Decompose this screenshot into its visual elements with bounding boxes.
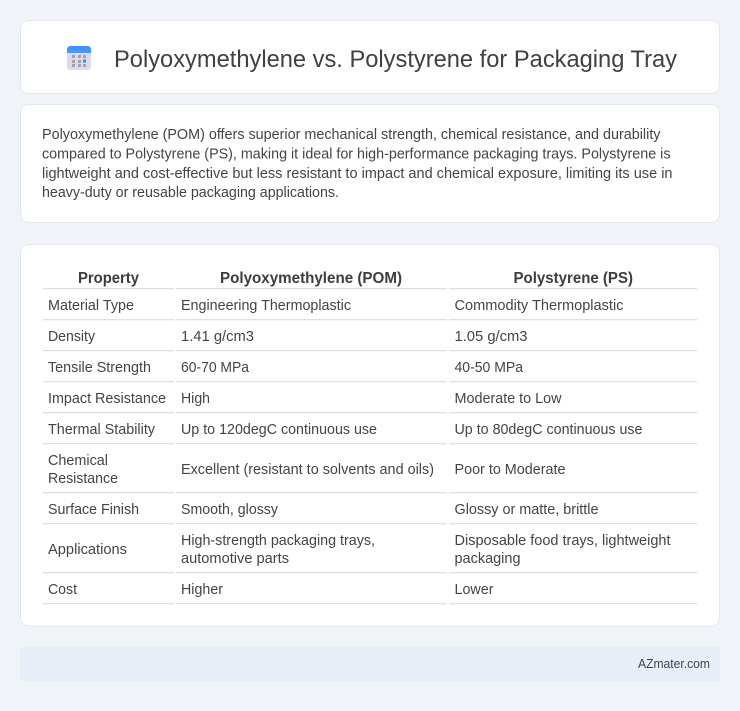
text block: summary: Polyoxymethylene (POM) offers superior mechanical strength, chemical resistance, and durability: [42, 127, 661, 143]
text block: summary: lightweight and cost-effective but less resistant to impact and chemical exposure, limiting its use in: [42, 166, 672, 182]
row: cost: Cost: [48, 582, 77, 598]
row: cost: Higher: [181, 582, 223, 598]
row: chemical resistance: Poor to Moderate: [454, 462, 566, 478]
row: density: Density: [48, 329, 96, 345]
row: material type: [43, 298, 697, 320]
row: cost: [43, 582, 697, 604]
row: tensile strength: Tensile Strength: [48, 360, 151, 376]
row: surface finish: Glossy or matte, brittle: [454, 502, 598, 518]
text block: summary: compared to Polystyrene (PS), making it ideal for high-performance packaging trays. Polystyrene is: [42, 146, 670, 162]
row: material type: Material Type: [48, 298, 134, 314]
row: surface finish: [43, 502, 697, 524]
footer bar: AZmater.com: [638, 657, 710, 671]
row: tensile strength: [43, 360, 697, 382]
row: applications: High-strength packaging trays,: [181, 533, 375, 549]
row: surface finish: Surface Finish: [48, 502, 139, 518]
row: thermal stability: [43, 422, 697, 444]
row: impact resistance: High: [181, 391, 210, 407]
row: density: [43, 329, 697, 351]
row: surface finish: Smooth, glossy: [181, 502, 279, 518]
row: impact resistance: Impact Resistance: [48, 391, 166, 407]
row: applications: Applications: [48, 542, 127, 558]
table header row: Polyoxymethylene (POM): [220, 270, 402, 287]
row: applications: packaging: [454, 551, 520, 567]
row: cost: Lower: [454, 582, 494, 598]
panel: summary paragraph: [20, 104, 720, 222]
table header row: Polystyrene (PS): [514, 270, 633, 287]
text block: summary: heavy-duty or reusable packaging applications.: [42, 185, 339, 201]
row: material type: Commodity Thermoplastic: [454, 298, 624, 314]
row: impact resistance: [43, 391, 697, 413]
row: impact resistance: Moderate to Low: [454, 391, 562, 407]
panel: page title: [20, 20, 720, 94]
row: density: 1.05 g/cm3: [454, 329, 528, 345]
row: chemical resistance: Chemical: [48, 453, 108, 469]
row: tensile strength: 60-70 MPa: [181, 360, 250, 376]
row: tensile strength: 40-50 MPa: [454, 360, 524, 376]
row: density: 1.41 g/cm3: [181, 329, 254, 345]
panel: comparison table: [20, 244, 720, 626]
row: applications: automotive parts: [181, 551, 289, 567]
row: chemical resistance: Resistance: [48, 471, 118, 487]
row: applications: [43, 533, 697, 573]
row: thermal stability: Thermal Stability: [48, 422, 156, 438]
title: Polyoxymethylene vs. Polystyrene for Packaging Tray: [114, 46, 677, 73]
table header row: Property: [78, 270, 139, 287]
row: material type: Engineering Thermoplastic: [181, 298, 351, 314]
footer bar: [20, 647, 720, 681]
text block: summary: [42, 127, 672, 201]
row: chemical resistance: Excellent (resistant to solvents and oils): [181, 462, 434, 478]
row: chemical resistance: [43, 453, 697, 493]
row: thermal stability: Up to 120degC continuous use: [181, 422, 377, 438]
row: applications: Disposable food trays, lightweight: [454, 533, 670, 549]
icon: calendar grid: [67, 46, 91, 70]
table header row: [43, 270, 697, 289]
row: thermal stability: Up to 80degC continuous use: [454, 422, 642, 438]
